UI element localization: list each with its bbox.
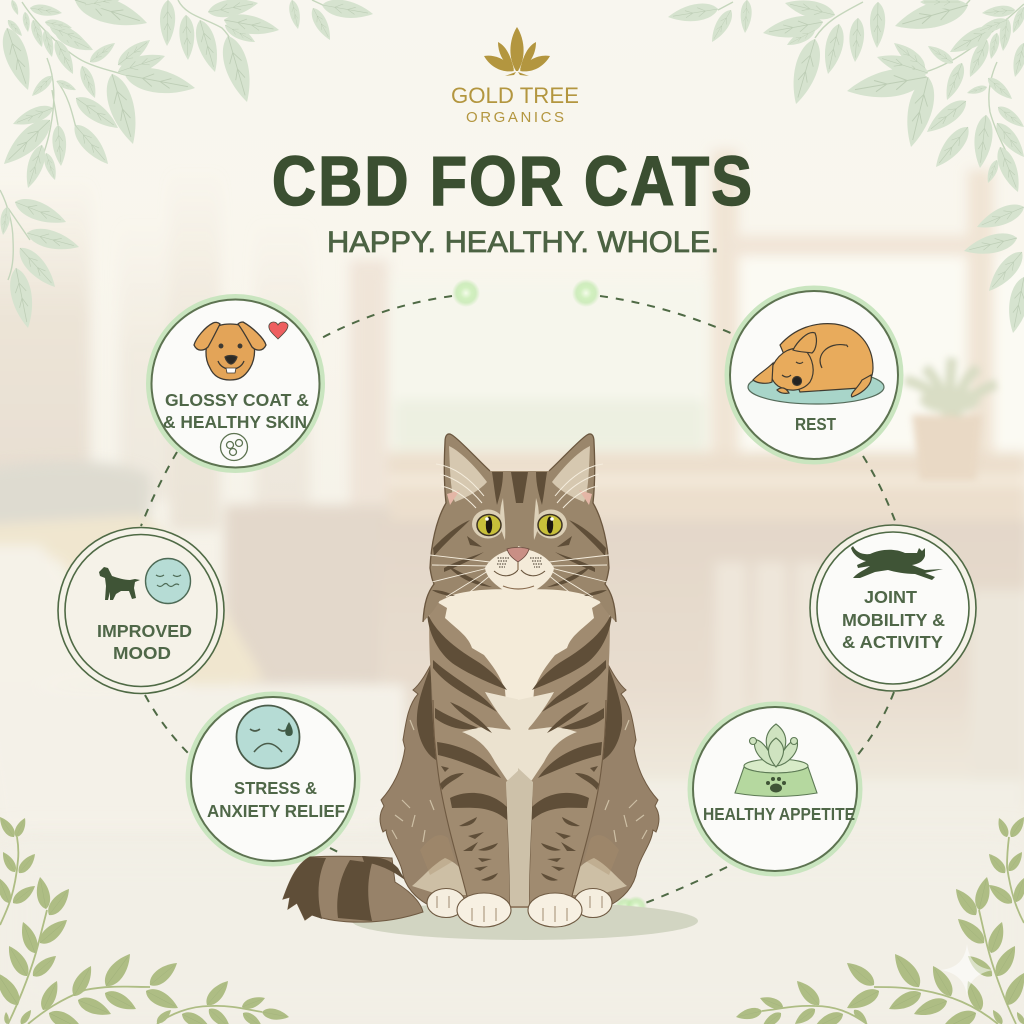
panel: glossy coat and healthy skin [148,296,322,470]
label line two: ANXIETY RELIEF [207,801,345,821]
cat right half [518,434,659,927]
panel: stress and anxiety relief [188,694,358,864]
glowing nodes [452,279,647,919]
brand name: GOLD TREE [451,83,579,108]
icon: sad face with tear [236,706,300,768]
panel: healthy appetite [690,704,860,874]
panel: improved mood [58,528,224,694]
label: GLOSSY COAT & [165,390,309,410]
leaves: bottom-right sprigs [735,814,1024,1024]
dashed connecting ring [141,296,897,905]
sparkle watermark [941,944,993,996]
leaves: top-left branches [0,0,374,190]
leaves: top-right branches [667,0,1024,195]
leaves: mid-right branch [962,199,1024,335]
icon: sleeping dog on mat [748,324,884,404]
icon: dog silhouette [99,567,140,600]
label: IMPROVED [97,621,192,641]
label line two: MOBILITY & [842,610,945,630]
title: CBD FOR CATS [272,142,752,220]
icon: skin cells [220,434,248,460]
label: HEALTHY APPETITE [703,804,855,824]
label: STRESS & [234,778,317,798]
panel: rest [727,288,901,462]
icon: gold lotus leaf [484,27,550,76]
icon: leaping cat [851,546,943,580]
tail [283,856,423,922]
label: JOINT [864,587,917,607]
brand logo [451,27,579,126]
label line two: & HEALTHY SKIN [163,412,307,432]
subtitle: HAPPY. HEALTHY. WHOLE. [327,226,719,259]
cat left half [380,434,521,927]
leaves: mid-left branch [0,190,81,330]
icon: food bowl with greens [735,724,817,796]
brand sub-name: ORGANICS [466,109,564,126]
cat illustration [283,434,659,927]
icon: heart [269,322,288,339]
label: REST [795,414,836,434]
panel: joint mobility and activity [810,525,976,691]
icon: dog face [194,322,266,380]
icon: calm face [146,558,190,604]
leaves: bottom-left sprigs [0,814,290,1024]
label line two: MOOD [113,643,171,663]
cat ground shadow [352,902,698,940]
label line three: & ACTIVITY [842,632,943,652]
cat nose and chin [503,548,534,589]
